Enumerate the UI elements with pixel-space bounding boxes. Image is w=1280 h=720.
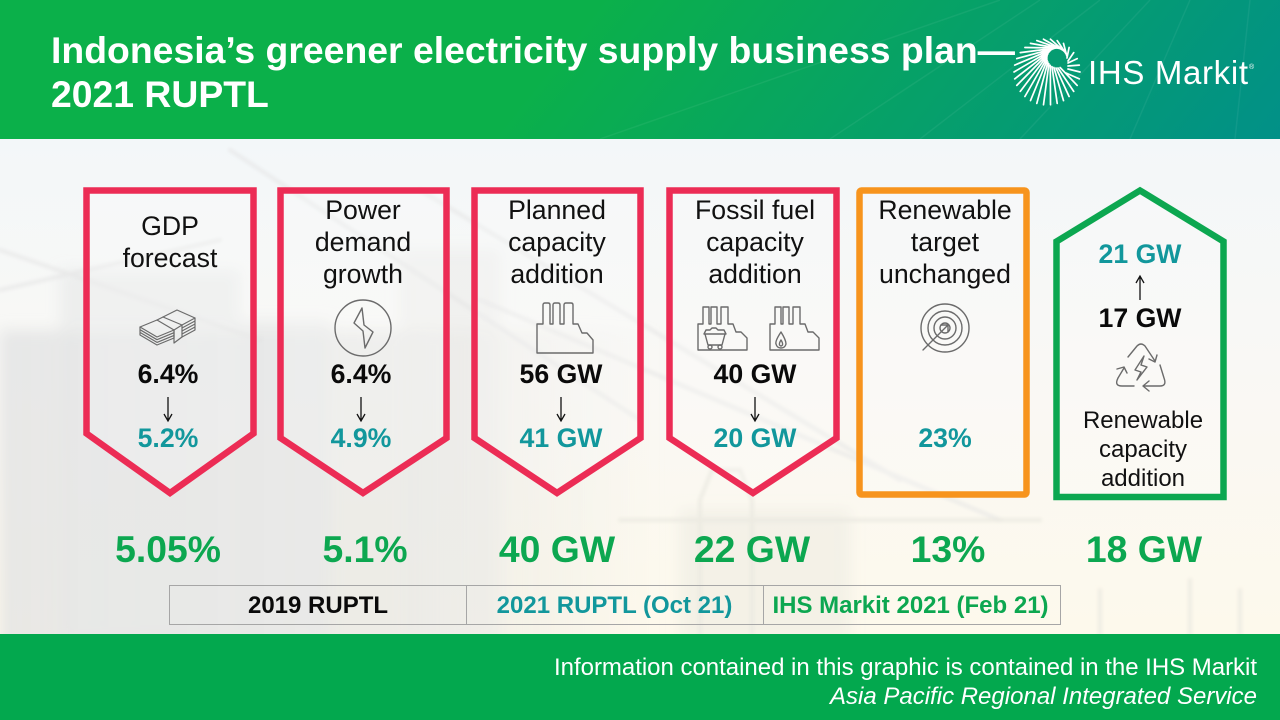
header band — [0, 0, 1280, 139]
icon: gas plant — [770, 307, 819, 350]
panel heading: renewable target unchanged: Renewable — [878, 195, 1012, 225]
panel heading: power demand growth: Power — [325, 195, 401, 225]
IHS Markit forecast values row — [115, 528, 1203, 570]
panel heading: renewable capacity addition: addition — [1101, 465, 1185, 492]
panel heading: GDP forecast: forecast — [123, 243, 218, 273]
value: renewable 18 GW: 18 GW — [1086, 528, 1203, 570]
arrow: down — [164, 397, 172, 421]
panel heading: planned capacity addition: capacity — [508, 227, 607, 257]
panel heading: power demand growth: growth — [323, 259, 403, 289]
legend: 2021 RUPTL: 2021 RUPTL (Oct 21) — [497, 592, 732, 619]
value: fossil 22 GW: 22 GW — [694, 528, 811, 570]
legend: IHS Markit 2021: IHS Markit 2021 (Feb 21) — [772, 592, 1049, 619]
icon: stack of money — [140, 310, 195, 345]
panel heading: GDP forecast: GDP — [141, 211, 199, 241]
panel heading: renewable capacity addition: Renewable — [1083, 407, 1203, 434]
value: 40 GW: 40 GW — [714, 359, 797, 389]
panel heading: power demand growth: demand — [315, 227, 411, 257]
value: demand 5.1%: 5.1% — [322, 528, 408, 570]
value: planned 40 GW: 40 GW — [499, 528, 616, 570]
value: renewable target 13%: 13% — [911, 528, 985, 570]
value: 6.4%: 6.4% — [138, 359, 198, 389]
legend table — [170, 586, 1060, 624]
value: 23%: 23% — [918, 423, 972, 453]
panel heading: fossil fuel capacity addition: capacity — [706, 227, 805, 257]
panel heading: fossil fuel capacity addition: Fossil fuel — [695, 195, 815, 225]
arrow: down — [751, 397, 759, 421]
value: 5.2%: 5.2% — [138, 423, 198, 453]
panel heading: renewable capacity addition: capacity — [1099, 436, 1187, 463]
legend: 2019 RUPTL: 2019 RUPTL — [248, 592, 388, 619]
panel heading: renewable target unchanged: unchanged — [879, 259, 1011, 289]
value: 20 GW: 20 GW — [714, 423, 797, 453]
arrow: down — [357, 397, 365, 421]
logo: IHS Markit sunburst and wordmark: ® — [1249, 63, 1255, 71]
value: 21 GW: 21 GW — [1099, 239, 1182, 269]
value: GDP 5.05%: 5.05% — [115, 528, 221, 570]
panel: planned capacity addition — [474, 190, 640, 493]
logo: IHS Markit sunburst and wordmark — [1014, 39, 1255, 105]
icon: recycling with lightning — [1117, 344, 1165, 391]
background: faded electrical substation photo — [0, 139, 1280, 650]
title line 2: 2021 RUPTL — [51, 73, 269, 115]
panel: renewable target unchanged — [860, 190, 1026, 494]
panel heading: planned capacity addition: Planned — [508, 195, 606, 225]
panel: GDP forecast — [86, 190, 254, 493]
value: 6.4%: 6.4% — [331, 359, 391, 389]
icon: lightning in circle — [335, 300, 391, 356]
title: Indonesia’s greener electricity supply business plan— — [51, 29, 1016, 71]
footer band — [0, 634, 1280, 720]
footer source line: Information contained in this graphic is contained in the IHS Markit — [554, 654, 1257, 681]
panel: fossil fuel capacity addition — [670, 190, 836, 493]
icon: factory — [537, 303, 593, 353]
value: 17 GW: 17 GW — [1099, 303, 1182, 333]
panel heading: planned capacity addition: addition — [510, 259, 604, 289]
value: 4.9%: 4.9% — [331, 423, 391, 453]
value: 56 GW: 56 GW — [520, 359, 603, 389]
arrow: up — [1136, 276, 1144, 300]
arrow: down — [557, 397, 565, 421]
panel heading: renewable target unchanged: target — [911, 227, 980, 257]
panel: renewable capacity addition — [1056, 190, 1224, 497]
footer service line: Asia Pacific Regional Integrated Service — [828, 683, 1257, 710]
value: 41 GW: 41 GW — [520, 423, 603, 453]
logo: IHS Markit sunburst and wordmark: IHS Markit — [1088, 54, 1248, 91]
panel heading: fossil fuel capacity addition: addition — [708, 259, 802, 289]
icon: target — [921, 304, 969, 352]
panel: power demand growth — [280, 190, 446, 493]
icon: coal plant — [698, 307, 747, 350]
